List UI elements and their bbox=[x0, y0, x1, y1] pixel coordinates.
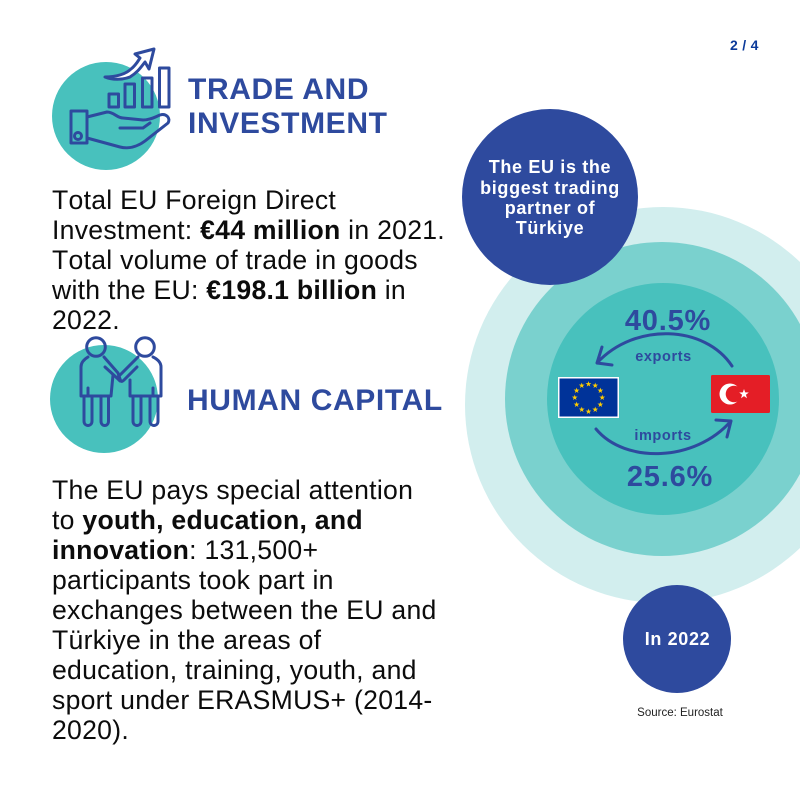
callout: biggest trading partner: Türkiye bbox=[516, 218, 584, 238]
page number: 2 / 4 bbox=[730, 37, 759, 53]
callout: in 2022: In 2022 bbox=[645, 629, 710, 649]
text: investment figures: Investment: €44 million in 2021. bbox=[52, 215, 445, 245]
callout: in 2022 bbox=[623, 585, 731, 693]
icon: EU flag: ★ bbox=[585, 380, 592, 388]
icon: Turkish flag bbox=[711, 375, 770, 413]
callout: biggest trading partner: biggest trading bbox=[480, 178, 620, 198]
icon: EU flag: ★ bbox=[599, 393, 606, 402]
icon: EU flag: ★ bbox=[571, 393, 578, 402]
icon: EU flag: ★ bbox=[573, 386, 580, 395]
heading: trade and investment bbox=[188, 73, 388, 140]
arrow: exports bbox=[597, 334, 732, 366]
text: human capital description: education, training, youth, and bbox=[52, 655, 417, 685]
callout: biggest trading partner: The EU is the bbox=[489, 157, 611, 177]
text: human capital description: participants took part in bbox=[52, 565, 334, 595]
text: investment figures bbox=[51, 185, 445, 335]
text: investment figures: Total volume of trade in goods bbox=[52, 245, 418, 275]
callout: biggest trading partner: partner of bbox=[505, 198, 596, 218]
text: human capital description: Türkiye in the areas of bbox=[52, 625, 322, 655]
icon: EU flag: ★ bbox=[578, 381, 585, 390]
icon: EU flag: ★ bbox=[597, 400, 604, 409]
callout: biggest trading partner bbox=[462, 109, 638, 285]
text: investment figures: Total EU Foreign Direct bbox=[52, 185, 336, 215]
text: human capital description: The EU pays special attention bbox=[52, 475, 413, 505]
stat: imports 25.6%: 25.6% bbox=[627, 461, 713, 493]
heading: human capital: HUMAN CAPITAL bbox=[187, 384, 443, 417]
text: investment figures: with the EU: €198.1 billion in bbox=[51, 275, 406, 305]
text: human capital description: exchanges between the EU and bbox=[52, 595, 437, 625]
label: exports: exports bbox=[635, 349, 692, 365]
text: human capital description: sport under ERASMUS+ (2014- bbox=[52, 685, 433, 715]
icon: EU flag: ★ bbox=[592, 405, 599, 414]
icon: EU flag: ★ bbox=[578, 405, 585, 414]
icon: EU flag: ★ bbox=[597, 386, 604, 395]
icon: EU flag bbox=[558, 377, 619, 418]
label: imports: imports bbox=[634, 428, 692, 444]
icon: EU flag: ★ bbox=[573, 400, 580, 409]
icon: EU flag: ★ bbox=[592, 381, 599, 390]
panel: concentric circles bbox=[465, 207, 800, 603]
text: human capital description: innovation: 131,500+ bbox=[52, 535, 318, 565]
arrow: imports bbox=[596, 420, 731, 454]
text: human capital description: 2020). bbox=[52, 715, 129, 745]
icon: EU flag: ★ bbox=[585, 407, 592, 416]
text: human capital description bbox=[52, 475, 437, 745]
panel: trade icon bbox=[52, 49, 169, 170]
source: Source: Eurostat bbox=[637, 707, 724, 719]
stat: exports 40.5%: 40.5% bbox=[625, 305, 711, 337]
text: investment figures: 2022. bbox=[52, 305, 120, 335]
panel: human capital icon bbox=[50, 338, 161, 453]
text: human capital description: to youth, education, and bbox=[52, 505, 363, 535]
heading: trade and investment: TRADE AND bbox=[188, 73, 369, 106]
heading: trade and investment: INVESTMENT bbox=[188, 107, 388, 140]
